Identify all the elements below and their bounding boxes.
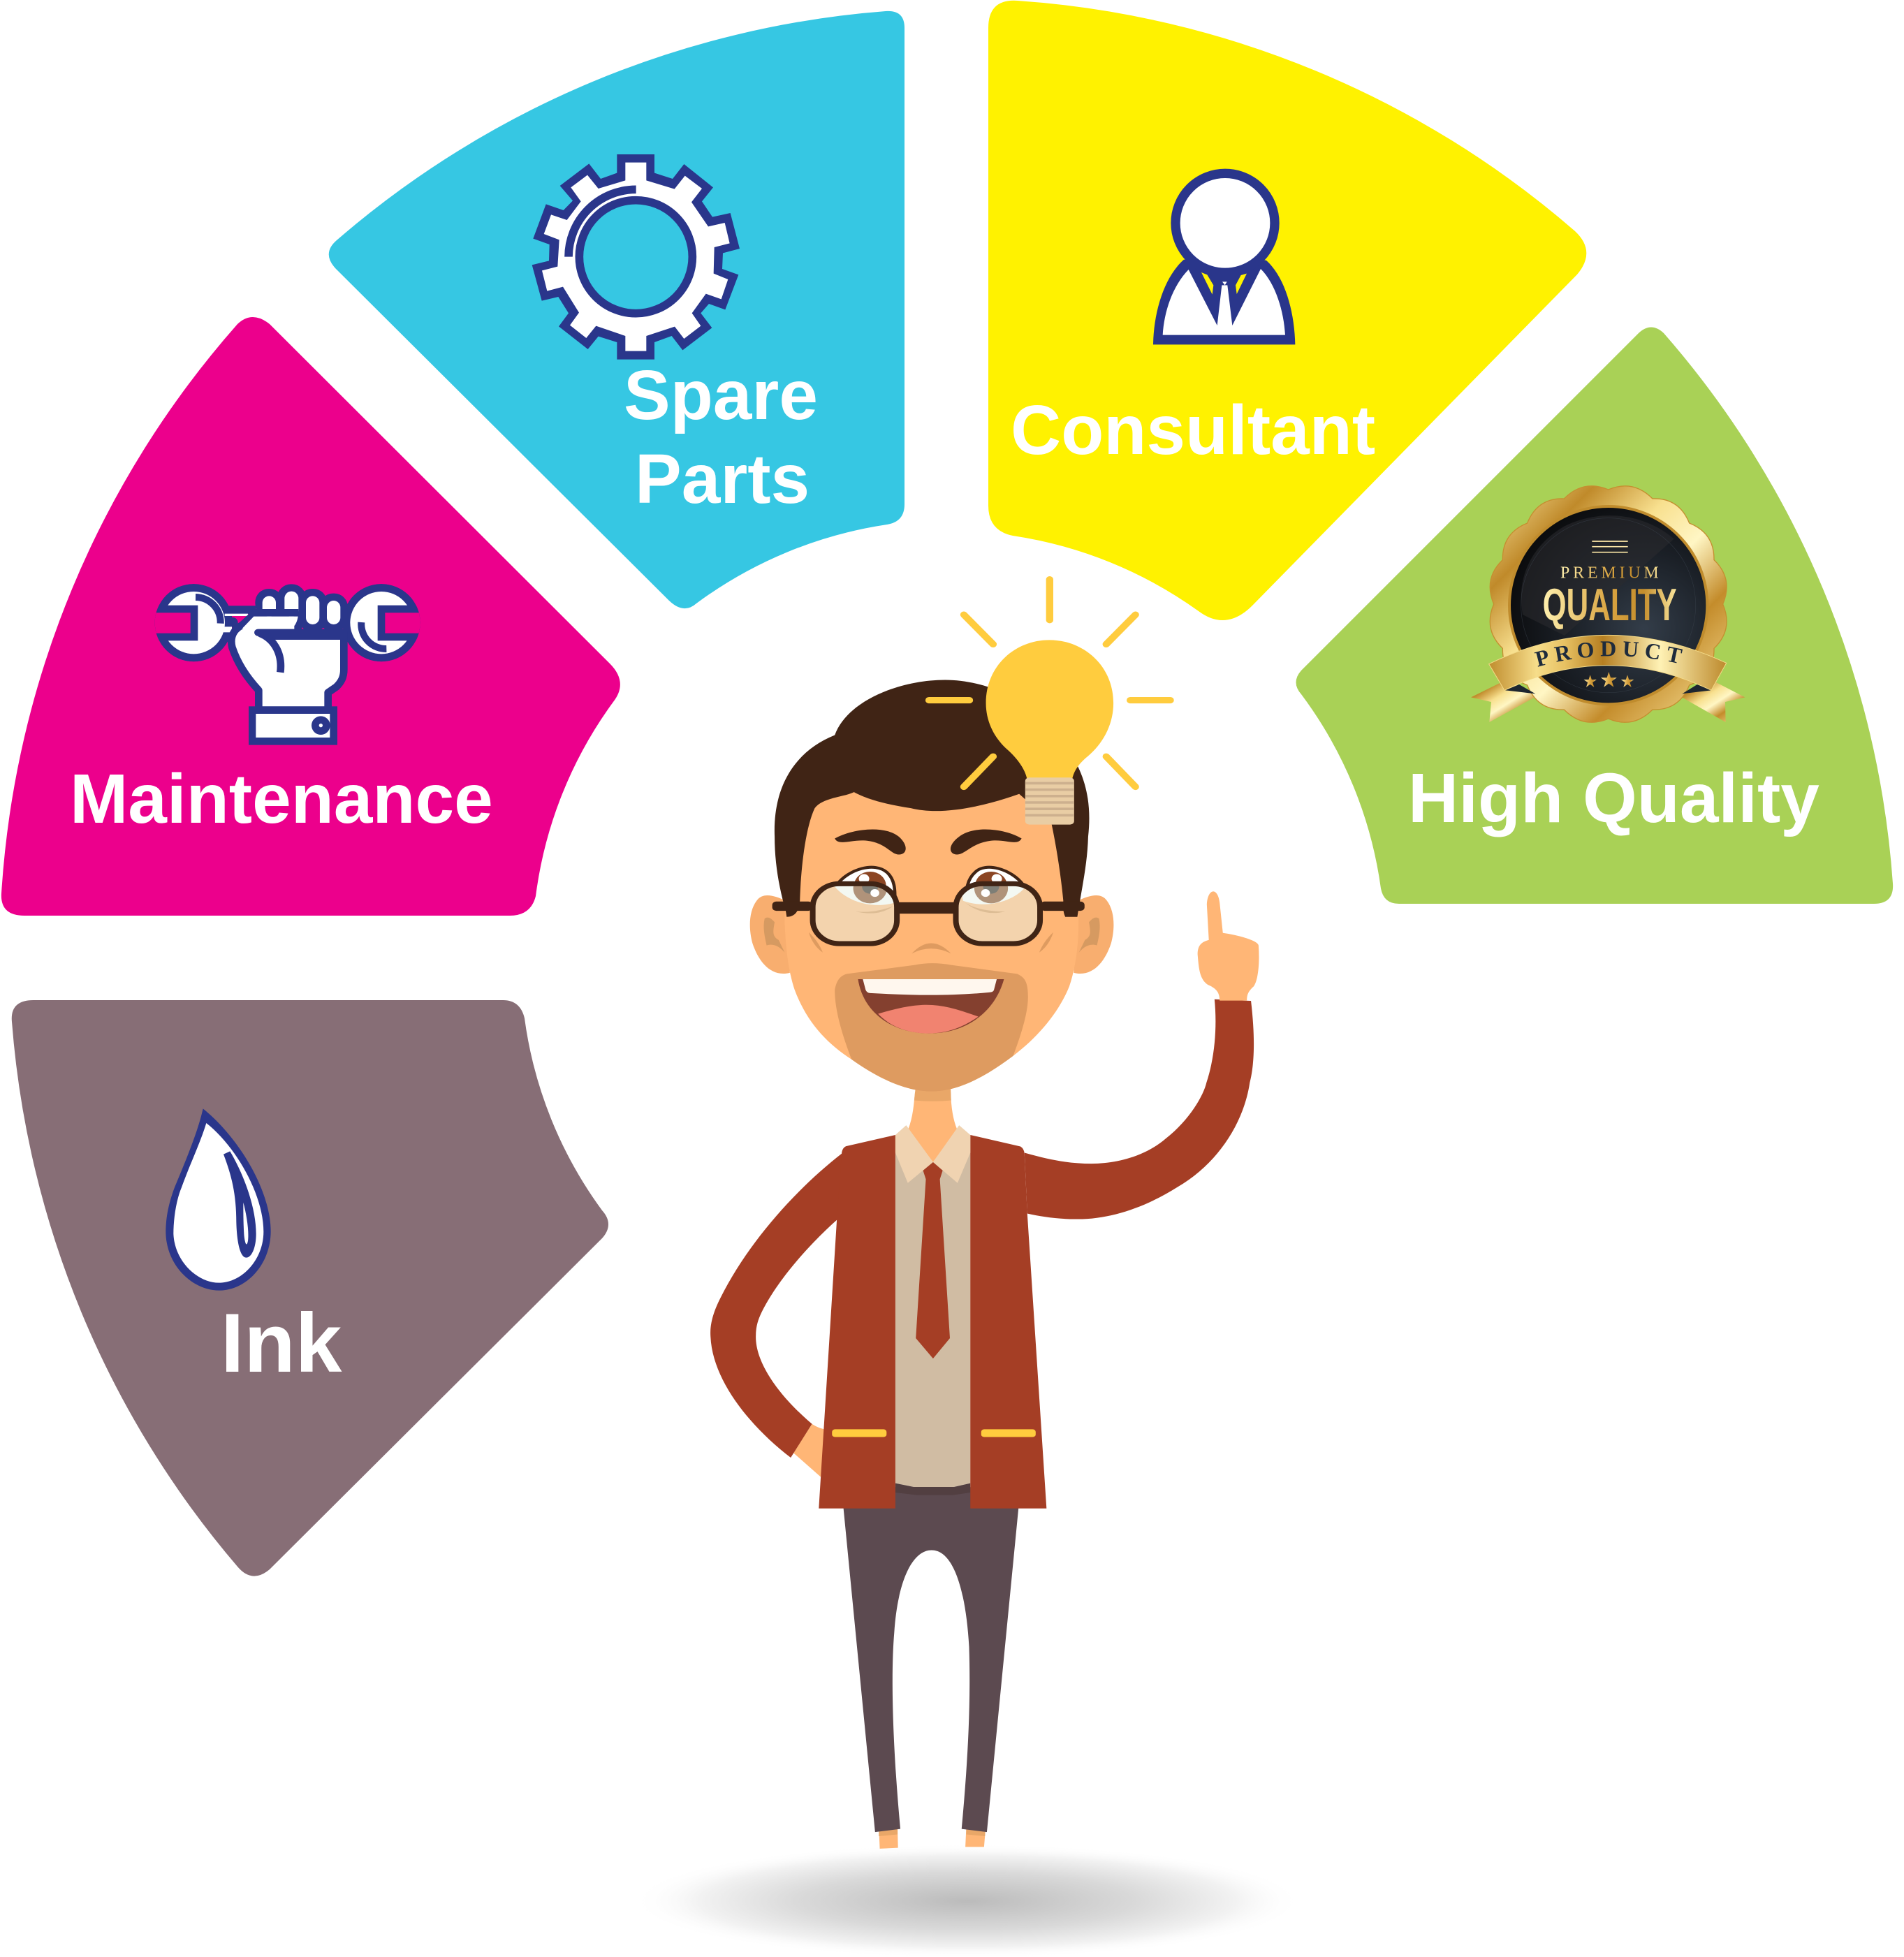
magenta segment — [1, 317, 620, 916]
mauve segment — [12, 1000, 608, 1576]
icon: premium quality badge: PREMIUM — [1560, 564, 1659, 582]
eyebrows — [835, 829, 1022, 854]
hair — [775, 680, 1089, 917]
label: Ink: Ink — [221, 1296, 342, 1390]
icon: premium quality badge: PRODUCT — [1534, 641, 1683, 667]
yellow segment — [988, 1, 1586, 620]
label: Spare Parts: Parts — [635, 440, 810, 518]
icon: person — [1153, 173, 1295, 344]
icon: premium quality badge: QUALITY — [1543, 579, 1677, 630]
green segment — [1296, 327, 1893, 904]
label: Consultant: Consultant — [1011, 391, 1375, 469]
icon: premium quality badge — [1471, 485, 1745, 723]
icon: ink drop — [166, 1108, 271, 1291]
cyan segment — [329, 11, 905, 608]
panel: Maintenance — [1, 317, 620, 916]
character: businessman with idea — [710, 580, 1259, 1849]
ears — [750, 895, 1113, 974]
face — [784, 787, 1078, 1092]
legs and trousers — [839, 1487, 1024, 1849]
mouth — [858, 979, 1004, 1034]
panel: Ink — [12, 1000, 608, 1576]
panel: Consultant — [988, 1, 1586, 620]
label: Maintenance: Maintenance — [70, 760, 493, 838]
icon: hand gripping wrench — [152, 584, 424, 745]
panel: High Quality — [1296, 327, 1893, 904]
icon: gear — [532, 154, 740, 360]
pointing hand — [1198, 891, 1259, 1001]
ground shadow — [632, 1844, 1303, 1957]
light bulb — [986, 640, 1113, 825]
light bulb rays — [929, 580, 1171, 787]
head, glasses, light bulb and hand — [750, 580, 1259, 1092]
label: Spare Parts: Spare — [624, 356, 818, 434]
beard — [835, 963, 1028, 1092]
label: High Quality: High Quality — [1408, 759, 1819, 837]
torso, jacket and arms — [710, 999, 1254, 1509]
eyes and glasses — [772, 867, 1085, 944]
panel: Spare Parts — [329, 11, 905, 608]
nose and cheek lines — [809, 932, 1053, 953]
label: Spare Parts — [624, 356, 818, 518]
